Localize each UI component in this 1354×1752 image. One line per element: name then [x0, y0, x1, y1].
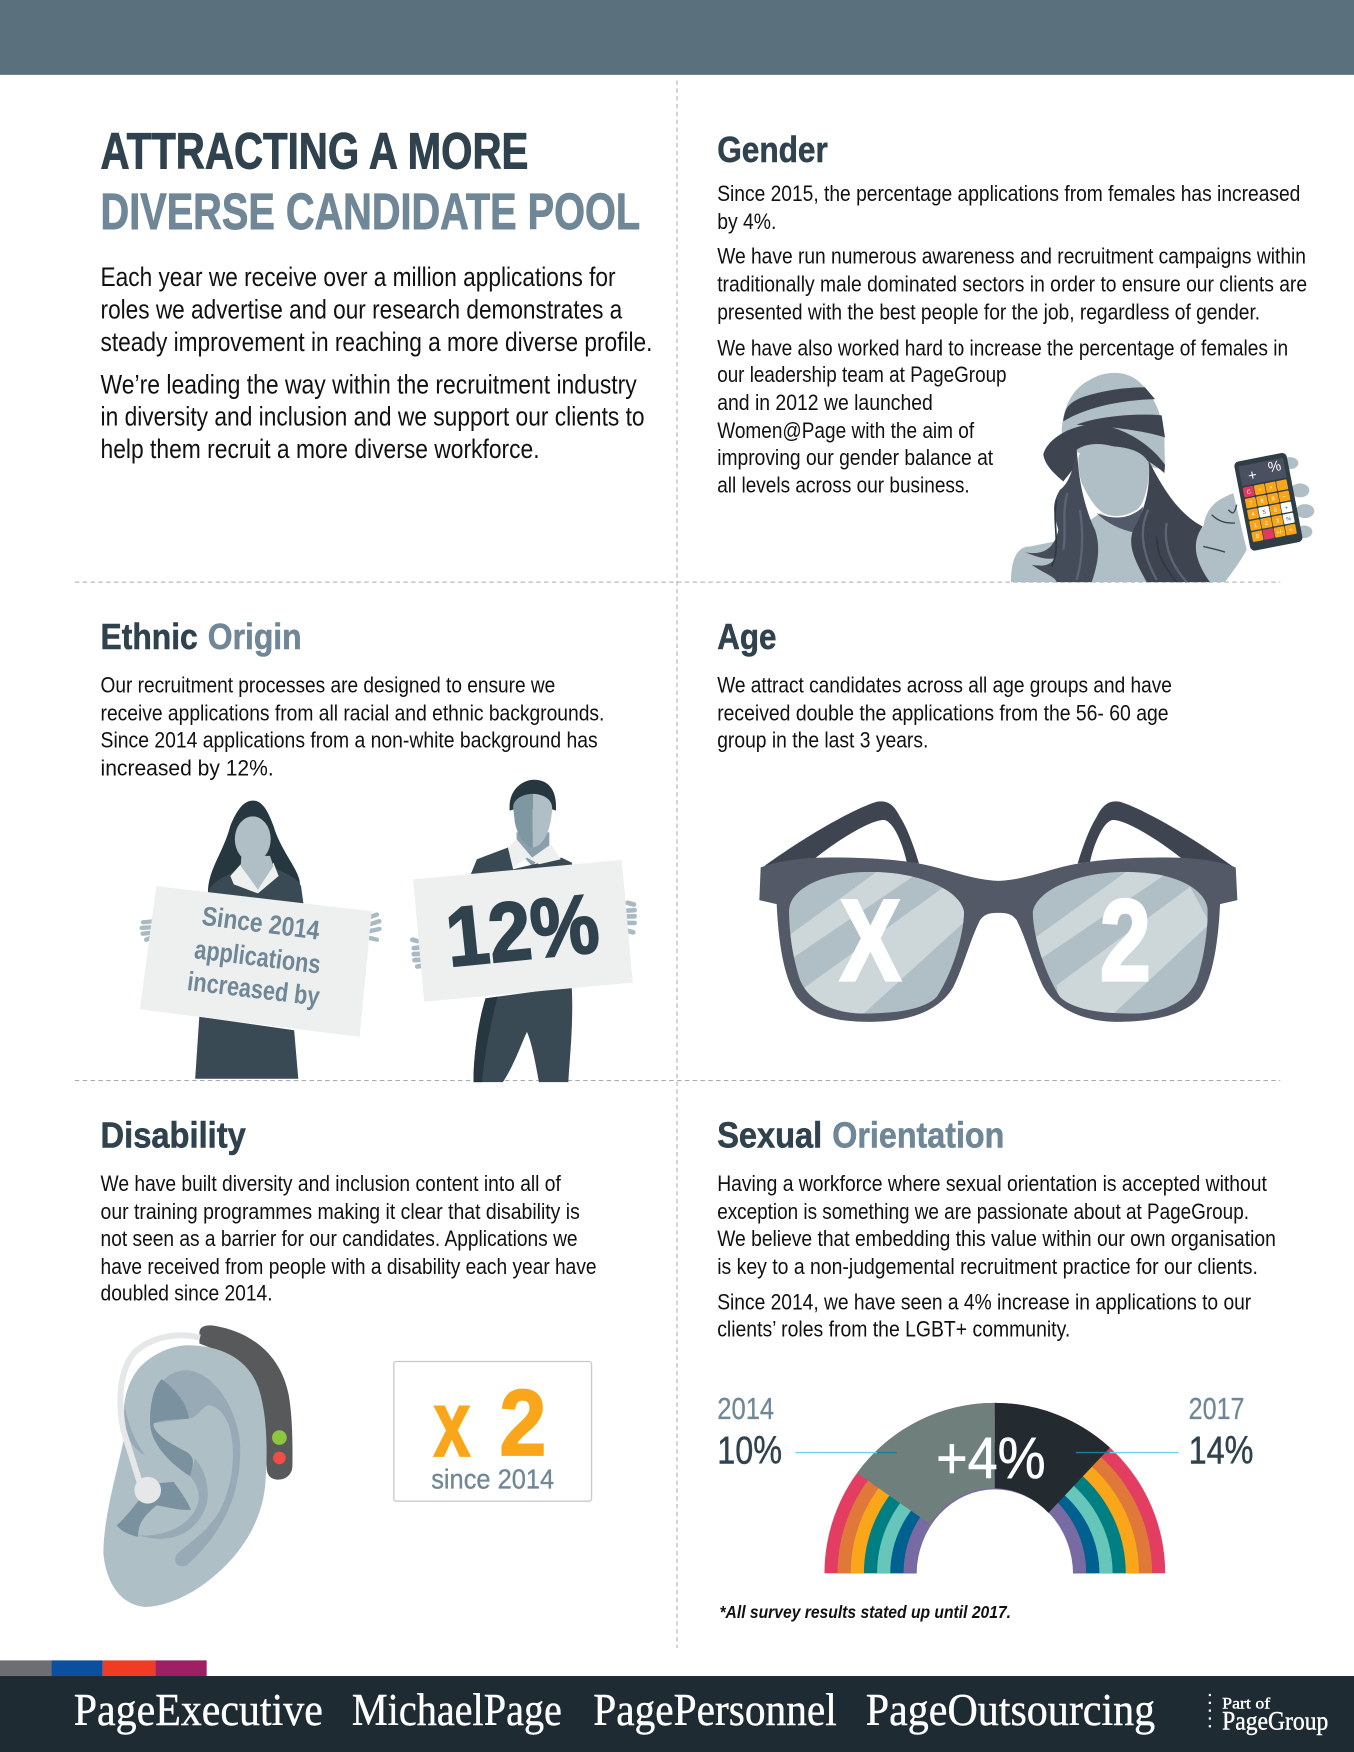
title: ATTRACTING A MORE [101, 122, 528, 180]
icon: calculator: × [1269, 485, 1273, 492]
icon: calculator: +/- [1276, 529, 1284, 536]
title [101, 122, 640, 240]
callout: x 2 since 2014 [394, 1361, 592, 1501]
illustration: glasses with x 2 [759, 801, 1237, 1022]
icon: calculator: 4 [1251, 512, 1255, 518]
text: gender body: presented with the best people for the job, regardless of gender. [717, 300, 1260, 325]
text: age body: We attract candidates across all age groups and have [717, 673, 1172, 698]
title: DIVERSE CANDIDATE POOL [101, 182, 640, 240]
text: gender body: by 4%. [717, 209, 776, 234]
icon: calculator: 6 [1273, 507, 1278, 514]
sign text: since 2014 applications increased by: applications [193, 934, 323, 979]
callout: x 2 since 2014: 2 [499, 1370, 546, 1475]
chart: rainbow arc 10% to 14%: 2014 [717, 1393, 774, 1426]
footer bar with brand names: PageGroup [1222, 1706, 1328, 1736]
text: sexual orientation body: We believe that embedding this value within our own organisation [717, 1226, 1276, 1251]
text: sexual orientation body: Having a workforce where sexual orientation is accepted without [717, 1171, 1268, 1196]
text: ethnic origin body: receive applications from all racial and ethnic backgrounds. [101, 701, 604, 726]
icon: calculator: 1 [1253, 523, 1258, 529]
text: gender body [717, 181, 1307, 498]
heading: ethnic origin [101, 617, 302, 657]
heading: ethnic origin: Origin [208, 617, 302, 657]
intro text: Each year we receive over a million applications for [101, 262, 616, 292]
panel: sexual orientation [717, 1116, 1276, 1622]
icon: calculator: 8 [1260, 498, 1264, 505]
intro text: steady improvement in reaching a more diverse profile. [101, 327, 652, 357]
text: disability body [101, 1171, 597, 1306]
text: gender body: and in 2012 we launched [717, 390, 933, 415]
sign text: since 2014 applications increased by: Since 2014 [200, 900, 322, 945]
text: disability body: have received from people with a disability each year have [101, 1254, 597, 1279]
text: ethnic origin body: Since 2014 applications from a non-white background has [101, 728, 598, 753]
heading: disability: Disability [101, 1116, 246, 1156]
icon: calculator: − [1282, 494, 1287, 501]
callout: x 2 since 2014: x [433, 1371, 470, 1476]
chart: rainbow arc 10% to 14%: 10% [717, 1430, 782, 1473]
chart: rainbow arc 10% to 14%: +4% [936, 1426, 1046, 1491]
heading: sexual orientation [717, 1116, 1004, 1156]
intro text [101, 262, 652, 464]
text: ethnic origin body: increased by 12%. [101, 755, 274, 780]
figure: woman with sign [140, 801, 379, 1079]
panel: gender [717, 130, 1314, 582]
text: disability body: doubled since 2014. [101, 1281, 273, 1306]
chart: rainbow arc 10% to 14%: 14% [1189, 1430, 1253, 1473]
figure: man with sign [412, 780, 635, 1082]
icon: calculator: 7 [1249, 501, 1253, 507]
text: sexual orientation body: clients’ roles from the LGBT+ community. [717, 1316, 1070, 1341]
header bar [0, 0, 1354, 75]
illustration: glasses with x 2: X [840, 877, 901, 1005]
icon: calculator [1234, 452, 1303, 551]
illustration: glasses with x 2: 2 [1100, 877, 1151, 1005]
footer bar with brand names [0, 1676, 1354, 1752]
footer bar with brand names: PageExecutive [74, 1684, 323, 1735]
footnote: *All survey results stated up until 2017. [719, 1602, 1011, 1622]
text: gender body: Women@Page with the aim of [717, 418, 975, 443]
illustration: two people holding signs [140, 780, 635, 1082]
heading: gender: Gender [717, 130, 828, 170]
icon: calculator: ÷ [1258, 487, 1262, 494]
text: gender body: all levels across our business. [717, 473, 970, 498]
footer bar with brand names: MichaelPage [352, 1684, 562, 1735]
icon: calculator: % [1267, 458, 1283, 476]
sign text: 12%: 12% [442, 877, 603, 985]
intro text: help them recruit a more diverse workforce. [101, 434, 540, 464]
text: ethnic origin body: Our recruitment processes are designed to ensure we [101, 673, 555, 698]
text: age body: group in the last 3 years. [717, 728, 928, 753]
text: gender body: our leadership team at PageGroup [717, 362, 1007, 387]
intro text: roles we advertise and our research demonstrates a [101, 294, 622, 324]
panel: ethnic origin [101, 617, 635, 1082]
icon: ear with hearing aid [103, 1325, 292, 1607]
heading: sexual orientation: Orientation [832, 1116, 1004, 1156]
illustration: woman in hat holding calculator [1011, 373, 1314, 582]
chart: rainbow arc 10% to 14% [717, 1393, 1253, 1574]
text: sexual orientation body: is key to a non-judgemental recruitment practice for our clients. [717, 1254, 1258, 1279]
panel: disability [101, 1116, 597, 1607]
footer bar with brand names: PageOutsourcing [866, 1684, 1155, 1735]
heading: sexual orientation: Sexual [717, 1116, 822, 1156]
icon: calculator: + [1284, 505, 1290, 512]
intro text: We’re leading the way within the recruitment industry [101, 369, 637, 399]
text: sexual orientation body: Since 2014, we have seen a 4% increase in applications to our [717, 1290, 1252, 1315]
intro text: in diversity and inclusion and we support our clients to [101, 402, 645, 432]
text: ethnic origin body [101, 673, 604, 780]
icon: calculator: + [1247, 467, 1258, 485]
text: disability body: We have built diversity and inclusion content into all of [101, 1171, 561, 1196]
text: age body [717, 673, 1172, 753]
icon: calculator: 9 [1271, 496, 1275, 503]
heading: age: Age [717, 617, 776, 657]
icon: calculator: 3 [1276, 518, 1280, 525]
callout: x 2 since 2014: since 2014 [431, 1463, 554, 1494]
chart: rainbow arc 10% to 14%: 2017 [1189, 1393, 1245, 1426]
sign text: since 2014 applications increased by: increased by [186, 966, 321, 1012]
text: disability body: our training programmes making it clear that disability is [101, 1199, 580, 1224]
footer bar with brand names: PagePersonnel [593, 1684, 837, 1735]
text: sexual orientation body [717, 1171, 1276, 1341]
text: age body: received double the applications from the 56- 60 age [717, 701, 1169, 726]
icon: calculator: C [1246, 489, 1252, 496]
icon: calculator: % [1286, 516, 1292, 523]
icon: calculator: 0 [1255, 534, 1260, 540]
footer bar with brand names: Part of [1222, 1695, 1271, 1712]
icon: calculator: 2 [1264, 521, 1269, 527]
heading: ethnic origin: Ethnic [101, 617, 198, 657]
icon: calculator: = [1289, 527, 1294, 534]
text: gender body: improving our gender balance at [717, 445, 994, 470]
text: sexual orientation body: exception is something we are passionate about at PageGroup. [717, 1199, 1249, 1224]
text: disability body: not seen as a barrier for our candidates. Applications we [101, 1226, 578, 1251]
sign text: since 2014 applications increased by [186, 900, 323, 1012]
panel: age [717, 617, 1237, 1022]
colour chips [0, 1660, 207, 1676]
icon: calculator: 5 [1262, 509, 1267, 516]
